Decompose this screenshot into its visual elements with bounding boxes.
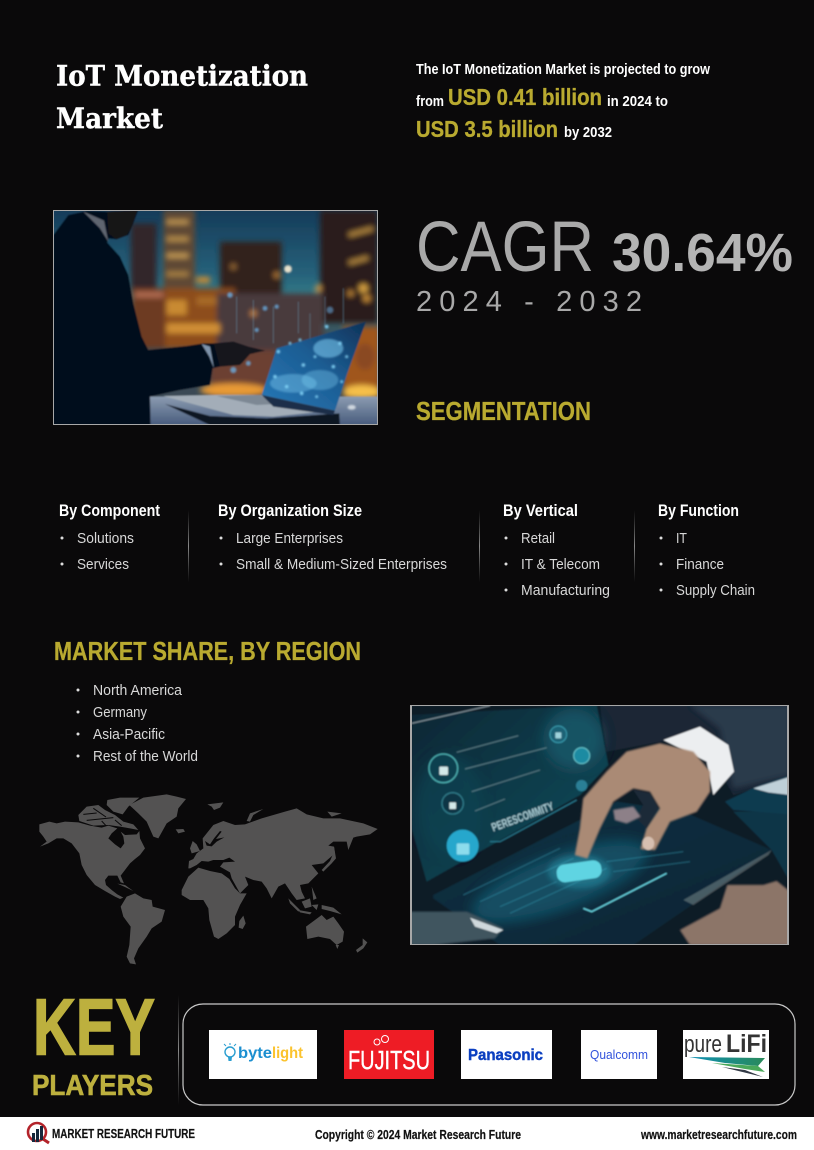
logo: pureLiFi: LiFi xyxy=(726,1030,767,1058)
logo: bytelight: light xyxy=(272,1045,304,1062)
footer logo icon xyxy=(28,1123,49,1143)
blurred skyline xyxy=(131,210,380,398)
americas and greenland xyxy=(39,794,186,964)
segment: by function: Finance xyxy=(676,556,724,573)
heading: key players xyxy=(32,982,155,1102)
CAGR value: CAGR xyxy=(416,208,594,287)
screen lines xyxy=(457,736,547,811)
eurasia, africa and oceania xyxy=(182,802,378,953)
logo: pureLiFi xyxy=(683,1030,769,1079)
logo: qualcomm xyxy=(581,1030,657,1079)
logo: pureLiFi: pure xyxy=(684,1031,722,1058)
logo: bytelight: byte xyxy=(238,1045,272,1062)
sleeve xyxy=(600,706,770,796)
logo: qualcomm: Qualcomm xyxy=(590,1047,648,1062)
person xyxy=(54,211,244,424)
logo: fujitsu: FUJITSU xyxy=(348,1045,430,1075)
screen label: PERESCOMMITY xyxy=(490,799,555,834)
footer brand: MARKET RESEARCH FUTURE xyxy=(52,1127,195,1141)
segment: by component: By Component xyxy=(59,501,160,520)
segment: by vertical: By Vertical xyxy=(503,501,578,520)
copyright: Copyright © 2024 Market Research Future xyxy=(315,1128,521,1142)
logo: fujitsu xyxy=(344,1030,434,1079)
segment: by organization size: By Organization Size xyxy=(218,501,362,520)
region list: Rest of the World xyxy=(93,748,198,765)
heading: segmentation: SEGMENTATION xyxy=(416,396,591,426)
segment: by organization size: Large Enterprises xyxy=(236,530,343,547)
segment: by vertical xyxy=(503,501,610,599)
heading: key players: KEY xyxy=(33,982,155,1072)
lower right hand xyxy=(680,881,790,945)
logo: panasonic: Panasonic xyxy=(468,1047,543,1064)
footer xyxy=(0,1117,814,1150)
segment: by organization size: Small & Medium-Sized Enterprises xyxy=(236,556,447,573)
segment: by function xyxy=(658,501,755,599)
region list xyxy=(76,682,198,765)
keyboard deck xyxy=(433,802,772,945)
laptop base and shadow xyxy=(166,404,340,424)
segment: by function: Supply Chain xyxy=(676,582,755,599)
photo: hand over cybersecurity laptop xyxy=(410,705,790,945)
segment: by function: By Function xyxy=(658,501,739,520)
laptop screen xyxy=(412,705,608,882)
segment: by component: Services xyxy=(77,556,129,573)
lock icons xyxy=(429,726,590,862)
device on the right xyxy=(725,776,787,813)
CAGR value: 30.64% xyxy=(612,223,793,283)
segment: by function: IT xyxy=(676,530,687,547)
market projection text: from xyxy=(416,94,444,110)
hologram lines and dots xyxy=(237,288,343,343)
main hand xyxy=(575,743,710,858)
market projection text: USD 0.41 billion xyxy=(448,84,602,110)
logo: bytelight xyxy=(209,1030,317,1079)
world map xyxy=(39,794,378,964)
title: IoT Monetization xyxy=(56,60,308,92)
segment: by component xyxy=(59,501,160,573)
market projection text: The IoT Monetization Market is projected to grow xyxy=(416,62,711,78)
title xyxy=(56,60,308,135)
key players panel xyxy=(183,1004,795,1105)
market projection text: in 2024 to xyxy=(607,94,668,110)
laptop screen xyxy=(262,322,366,411)
segment: by component: Solutions xyxy=(77,530,134,547)
shirt cuff xyxy=(663,727,734,795)
segment: by organization size xyxy=(218,501,447,573)
region list: North America xyxy=(93,682,183,699)
heading: key players: PLAYERS xyxy=(32,1070,153,1102)
glowing key xyxy=(548,855,611,888)
market projection text xyxy=(416,62,711,142)
region list: Germany xyxy=(93,704,147,721)
heading: market share by region: MARKET SHARE, BY REGION xyxy=(54,636,361,666)
market projection text: USD 3.5 billion xyxy=(416,116,558,142)
segment: by vertical: Manufacturing xyxy=(521,582,610,599)
market projection text: by 2032 xyxy=(564,125,612,141)
CAGR value xyxy=(416,208,793,318)
segment: by vertical: Retail xyxy=(521,530,555,547)
mouse xyxy=(410,912,503,945)
photo: businessman with holographic laptop xyxy=(50,208,380,427)
logo: panasonic xyxy=(461,1030,552,1079)
region list: Asia-Pacific xyxy=(93,726,165,743)
CAGR value: 2024 - 2032 xyxy=(416,286,642,318)
title: Market xyxy=(56,102,163,135)
table xyxy=(150,397,380,427)
segment: by vertical: IT & Telecom xyxy=(521,556,600,573)
